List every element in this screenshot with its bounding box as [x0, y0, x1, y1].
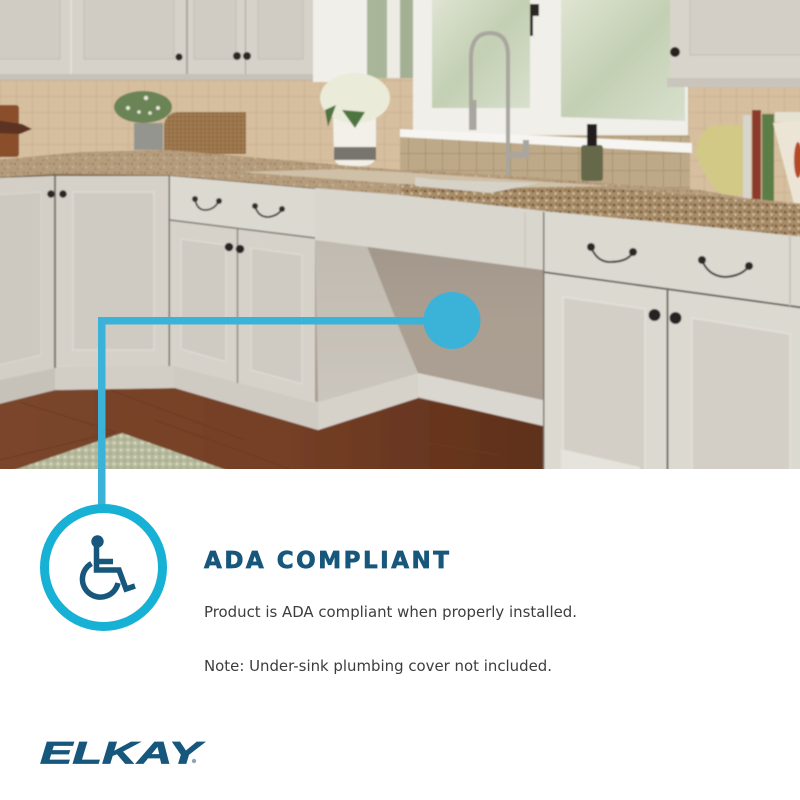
large drawer pulls	[587, 243, 753, 277]
logo: Elkay	[40, 734, 206, 770]
logo: Elkay: ELKAY	[40, 734, 206, 770]
vertical leader	[98, 317, 106, 507]
upper cabinet right	[667, 0, 800, 87]
body text: compliance statement: Product is ADA compliant when properly installed.	[204, 603, 577, 621]
yellow vase	[696, 125, 744, 195]
callout connector line and hotspot	[98, 292, 480, 507]
horizontal leader	[98, 317, 428, 324]
ring	[44, 508, 162, 626]
small drawer pulls	[192, 196, 285, 217]
knee space wall	[315, 235, 545, 410]
window	[400, 0, 692, 153]
kitchen scene	[0, 0, 800, 475]
countertop	[0, 150, 800, 240]
knee space side panel	[315, 238, 418, 402]
right cabinet drawer and doors	[543, 211, 800, 475]
hotspot dot	[424, 292, 480, 349]
heading: ADA COMPLIANT	[204, 548, 449, 574]
darker backsplash under window	[400, 136, 690, 196]
books	[743, 110, 800, 204]
sink apron panel	[315, 188, 545, 270]
corner cabinet drawer and doors	[168, 176, 315, 403]
flower vase	[320, 73, 390, 166]
floor	[0, 388, 548, 475]
cutting board	[0, 105, 32, 157]
scene backing	[56, 366, 96, 368]
upper cabinets left	[0, 0, 313, 80]
wheelchair symbol	[82, 535, 135, 597]
icon: wheelchair in ring	[44, 508, 162, 626]
lower left cabinet doors	[0, 176, 169, 381]
body text: note: Note: Under-sink plumbing cover not included.	[204, 657, 552, 675]
wall and green accent	[313, 0, 413, 82]
rug	[8, 433, 232, 472]
bread box	[164, 112, 246, 154]
soap dispenser	[581, 124, 603, 181]
backsplash tile	[0, 77, 800, 204]
faucet	[471, 33, 526, 175]
baseboards	[0, 365, 543, 430]
floor plank seams	[34, 406, 114, 432]
potted plant	[114, 91, 172, 150]
